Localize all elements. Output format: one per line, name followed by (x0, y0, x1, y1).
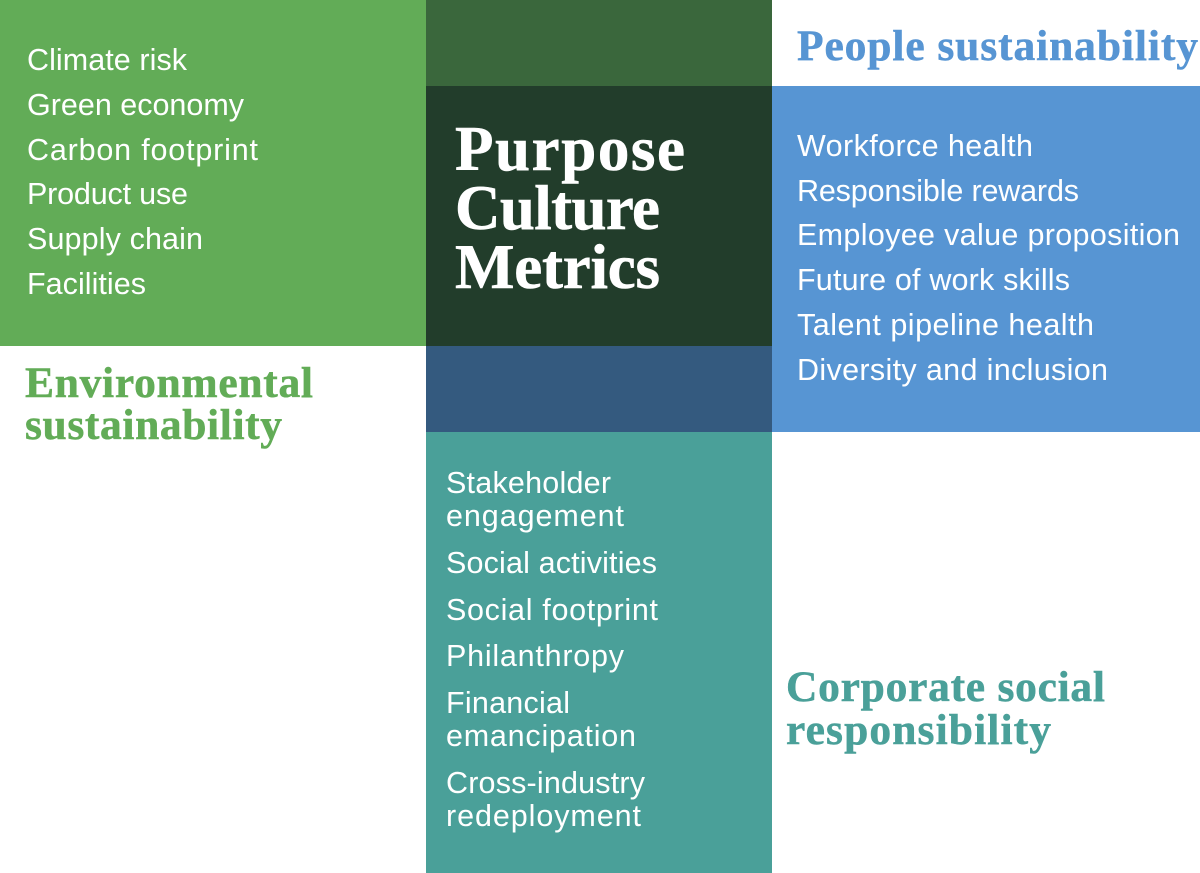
title (455, 114, 685, 302)
list: social items: Social footprint (446, 593, 659, 627)
list: people items: Future of work skills (797, 263, 1070, 297)
list: social items: Social activities (446, 546, 657, 580)
list: environmental items: Carbon footprint (27, 133, 259, 167)
list: environmental items: Supply chain (27, 222, 203, 256)
list: social items: Cross-industry (446, 766, 646, 800)
list: people items: Diversity and inclusion (797, 353, 1108, 387)
list: environmental items: Climate risk (27, 43, 188, 77)
list: social items: engagement (446, 499, 625, 533)
list: people items: Responsible rewards (797, 174, 1079, 208)
heading: corporate social responsibility: responsibility (786, 706, 1051, 754)
list: people items (797, 129, 1180, 387)
list: social items (446, 466, 659, 833)
heading: environmental sustainability (25, 359, 313, 449)
title: Purpose (455, 114, 685, 184)
list: social items: Philanthropy (446, 639, 625, 673)
panel: environmental sustainability (0, 0, 426, 346)
list: environmental items: Product use (27, 177, 188, 211)
heading: corporate social responsibility (786, 663, 1105, 754)
list: social items: redeployment (446, 799, 642, 833)
panel: centre (426, 86, 772, 346)
list: environmental items: Green economy (27, 88, 245, 122)
heading: environmental sustainability: Environmental (25, 359, 313, 407)
panel: blue overlap (426, 346, 772, 432)
list: environmental items (27, 43, 259, 301)
list: people items: Employee value proposition (797, 218, 1180, 252)
title: Metrics (455, 232, 660, 302)
title: Culture (455, 173, 660, 243)
panel: people sustainability (772, 86, 1200, 432)
list: people items: Workforce health (797, 129, 1033, 163)
panel: green overlap (426, 0, 772, 86)
list: environmental items: Facilities (27, 267, 146, 301)
list: social items: emancipation (446, 719, 636, 753)
list: social items: Financial (446, 686, 570, 720)
panel: corporate social responsibility (426, 432, 772, 873)
heading: corporate social responsibility: Corporate social (786, 663, 1105, 711)
heading: environmental sustainability: sustainability (25, 401, 282, 449)
list: people items: Talent pipeline health (797, 308, 1094, 342)
list: social items: Stakeholder (446, 466, 611, 500)
heading: people sustainability: People sustainability (797, 22, 1198, 70)
